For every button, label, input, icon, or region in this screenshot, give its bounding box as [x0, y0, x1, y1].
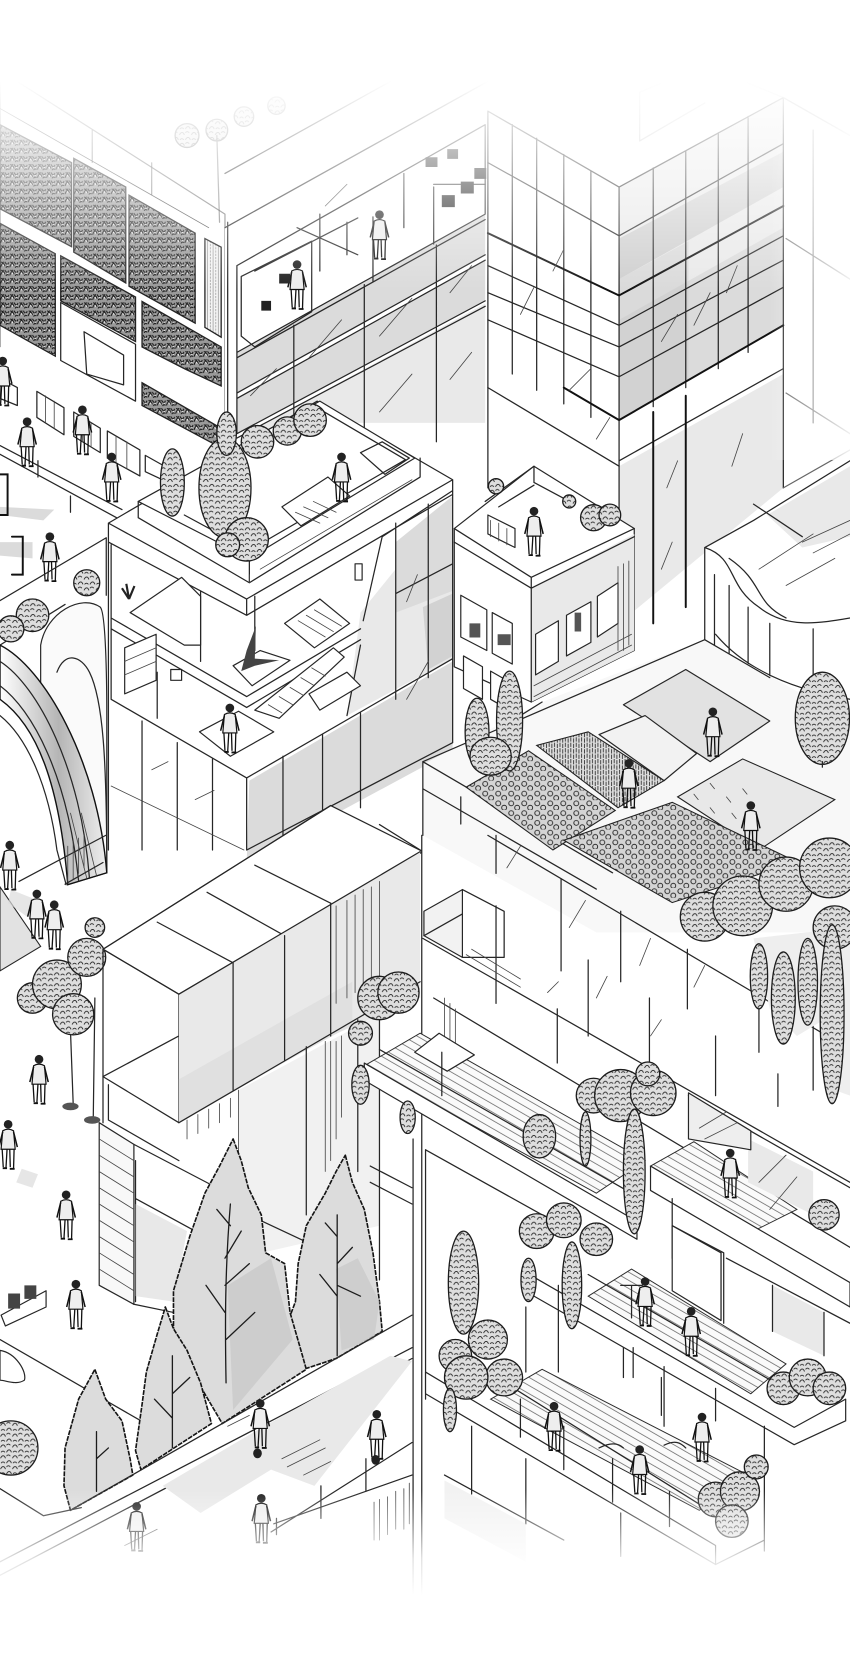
office interior [241, 149, 486, 347]
cantilever box volume [99, 806, 423, 1312]
building at far right [783, 98, 850, 488]
curved-facade building [705, 461, 850, 732]
blank lower margin [0, 1595, 850, 1670]
left building with green wall [0, 70, 225, 645]
bench [1, 1291, 46, 1326]
ribbed pillar [99, 1123, 134, 1304]
rooftop trees [160, 404, 326, 561]
lower half of drawing [0, 806, 850, 1594]
conical trees in planter [64, 1139, 382, 1510]
street and planter edge [0, 1315, 412, 1575]
foliage on terrace and wall [349, 838, 850, 1234]
roof terrace parapet [138, 401, 415, 558]
small brick building [454, 466, 634, 710]
lower terrace [426, 1231, 768, 1565]
central office tower [225, 27, 488, 542]
tall glass tower [488, 65, 850, 629]
plaza with pedestrians [0, 835, 141, 1516]
arches [0, 570, 107, 885]
middle terrace [519, 1203, 850, 1445]
interior rooms [122, 564, 362, 756]
rooftop shrub on left building [175, 97, 285, 222]
right building facade [413, 835, 850, 1594]
cypress on farm and beside curve [465, 671, 849, 775]
pod and tree remnants [0, 1350, 25, 1383]
windows [461, 561, 632, 710]
parasol [415, 1033, 474, 1071]
roof stair and seated figure [282, 442, 409, 526]
rooftop farm [423, 640, 850, 932]
top fade [0, 0, 850, 290]
glass overlook box [424, 890, 462, 957]
central terrace building [108, 401, 453, 862]
crop beds [466, 669, 835, 903]
right edge fade [770, 60, 850, 460]
green wall panels [0, 125, 221, 448]
upper terrace [364, 1033, 850, 1323]
walkway with fences [0, 347, 225, 645]
roof terrace figures and plants [488, 507, 543, 556]
shrubs behind arches [0, 570, 100, 642]
street tree [17, 918, 106, 1124]
bottom fade [0, 1490, 850, 1595]
